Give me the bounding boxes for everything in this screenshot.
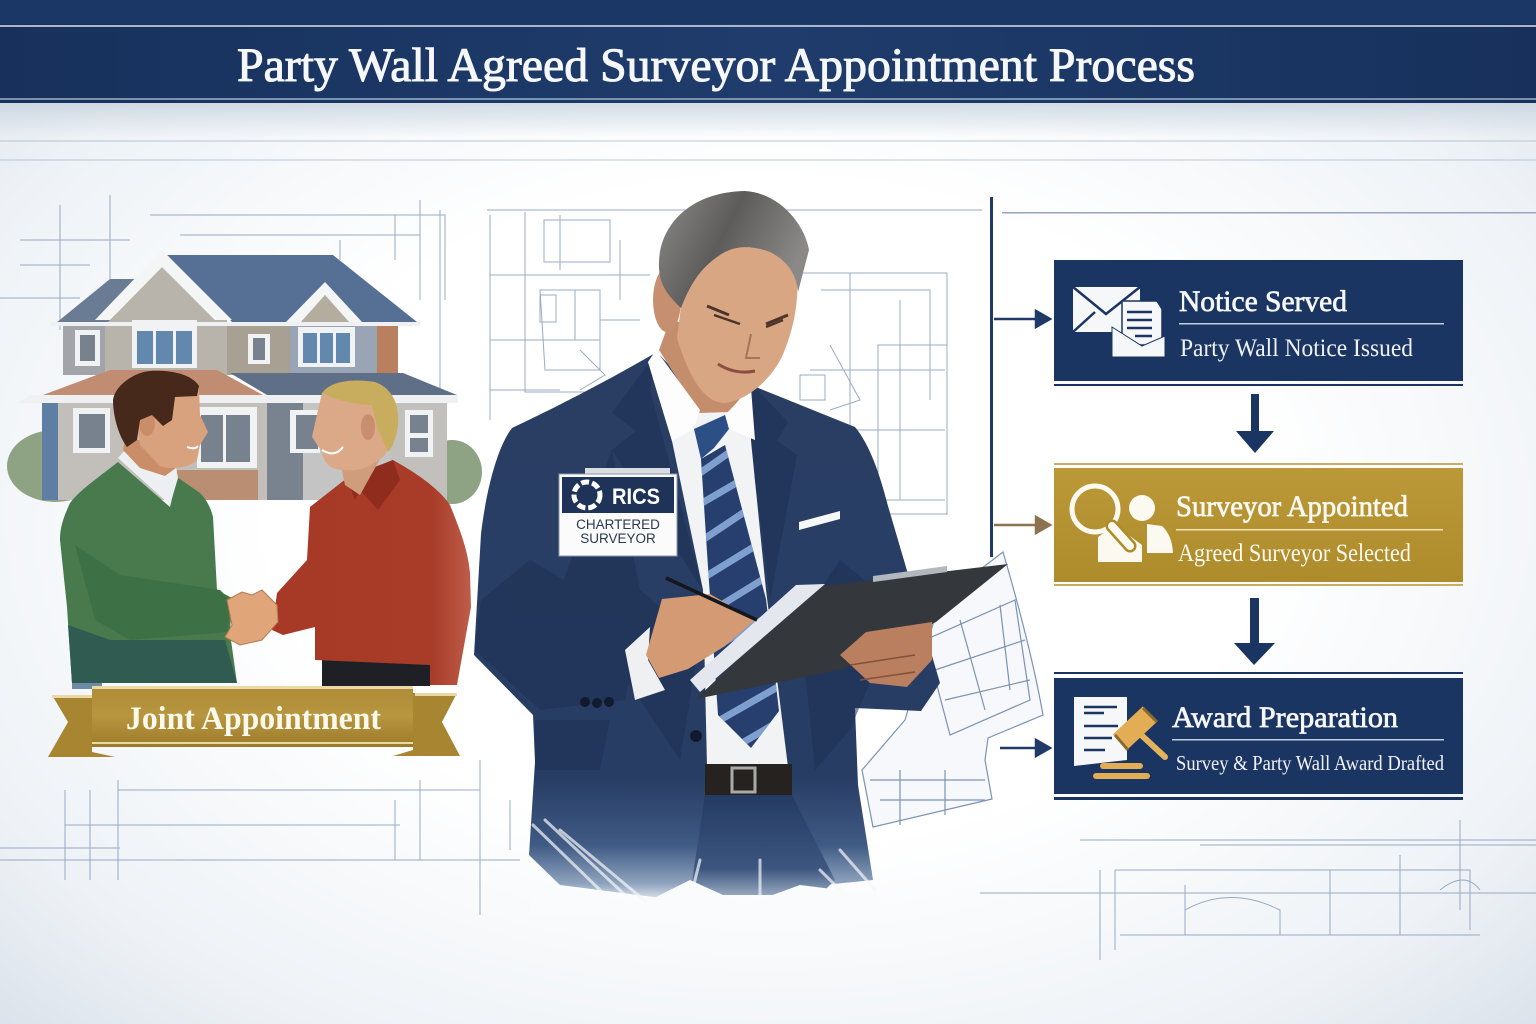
roof — [167, 255, 417, 322]
bushes — [7, 430, 482, 504]
jacket buttons — [580, 697, 702, 742]
house illustration — [7, 250, 482, 504]
arrow to step 1 — [994, 311, 1050, 327]
pocket square — [799, 511, 840, 530]
shirt cuff — [625, 627, 665, 700]
blueprint line decoration — [0, 141, 1536, 960]
writing hand — [646, 594, 755, 678]
face features — [707, 306, 788, 372]
rics badge: RICS — [612, 484, 660, 509]
arrow to step 2 — [994, 517, 1050, 533]
shirt — [648, 362, 788, 767]
heading: Surveyor Appointed — [1176, 490, 1408, 523]
surveyor figure — [474, 191, 1008, 915]
pen — [666, 578, 757, 620]
collar — [648, 350, 700, 441]
lapels — [612, 352, 703, 590]
trousers — [690, 795, 835, 895]
step 1: notice served — [1054, 260, 1463, 386]
rics badge: CHARTERED — [576, 517, 660, 532]
blueprint sheet behind clipboard — [862, 552, 1043, 827]
banner label: Joint Appointment — [126, 701, 381, 737]
title: Party Wall Agreed Surveyor Appointment Process — [237, 40, 1195, 92]
heading: Award Preparation — [1172, 701, 1398, 734]
arrow to step 3 — [1000, 740, 1050, 756]
suit shading — [475, 450, 900, 770]
step 2: surveyor appointed — [1054, 463, 1463, 586]
timeline connector — [990, 197, 1536, 756]
lower walls — [42, 403, 58, 500]
suit body — [474, 352, 940, 900]
rics badge — [559, 468, 677, 556]
icon: document and gavel — [1074, 697, 1165, 779]
hair — [659, 191, 809, 308]
banner: joint appointment — [48, 686, 460, 757]
heading: Notice Served — [1179, 285, 1347, 318]
supporting hand — [840, 622, 932, 687]
subheading: Survey & Party Wall Award Drafted — [1176, 751, 1444, 775]
neighbour in red shirt — [272, 380, 471, 686]
clipboard — [696, 564, 1008, 699]
title bar — [0, 0, 1536, 103]
tie — [694, 415, 779, 748]
icon: magnifier and people — [1072, 486, 1173, 562]
belt — [705, 764, 792, 795]
down arrow 1 — [1236, 394, 1274, 453]
head — [677, 247, 797, 403]
subheading: Party Wall Notice Issued — [1180, 335, 1413, 362]
windows — [73, 320, 433, 468]
down arrow 2 — [1234, 598, 1275, 665]
neck — [659, 320, 760, 413]
icon: handshake — [225, 590, 278, 645]
brush strokes at hem — [530, 820, 880, 915]
icon: envelope and notice — [1073, 287, 1165, 357]
two neighbours shaking hands — [60, 371, 471, 689]
subheading: Agreed Surveyor Selected — [1178, 540, 1411, 567]
step 3: award preparation — [1054, 672, 1463, 800]
lower roofs — [43, 370, 263, 395]
neighbour in green jumper — [60, 371, 278, 689]
upper walls — [63, 323, 105, 375]
rics badge: SURVEYOR — [580, 531, 656, 546]
